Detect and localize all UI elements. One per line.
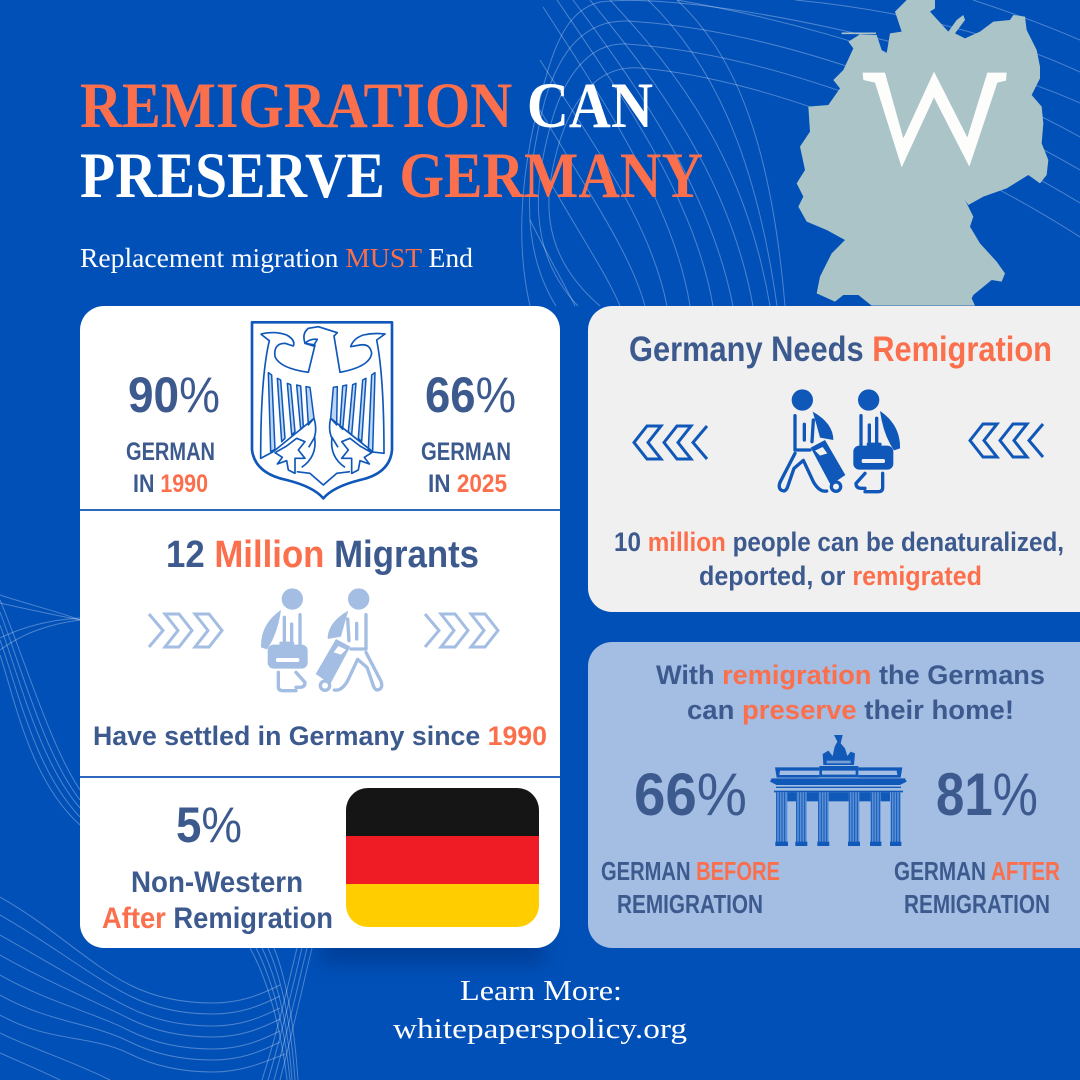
caption: settled since 1990: Have settled in Germany since 1990: [93, 721, 547, 751]
stat: 5 percent non-western: After Remigration: [102, 902, 333, 935]
stat: 90 percent German in 1990: IN 1990: [133, 470, 208, 498]
stat: 90 percent German in 1990: 90%: [128, 367, 220, 423]
title: REMIGRATION CAN: [80, 70, 653, 142]
stat: 90 percent German in 1990: [126, 367, 220, 498]
stat: 81 percent after: 81%: [936, 761, 1038, 828]
stat: 66 percent before: [601, 761, 780, 919]
heading: With remigration the Germans: [656, 660, 1045, 690]
heading: 12 million migrants: 12 Million Migrants: [166, 534, 479, 576]
icon: Brandenburg Gate: [770, 735, 907, 846]
stat: 66 percent German in 2025: IN 2025: [428, 470, 507, 498]
icon: migrants travelling: [261, 588, 382, 691]
arrows: left chevrons: [149, 614, 222, 647]
stat: 5 percent non-western: Non-Western: [131, 866, 303, 899]
stat: 66 percent German in 2025: GERMAN: [421, 438, 511, 466]
panel: preserve their home: [588, 642, 1080, 948]
stat: 5 percent non-western: 5%: [176, 797, 242, 853]
panel: Germany needs remigration: [588, 306, 1080, 612]
stat: 66 percent German in 2025: 66%: [425, 367, 516, 423]
text: 10 million people: deported, or remigrated: [699, 561, 982, 591]
icon: migrants leaving: [779, 389, 900, 492]
title: [80, 70, 703, 212]
stat: 66 percent German in 2025: [421, 367, 516, 498]
footer: learn more: Learn More:: [460, 975, 622, 1007]
stat: 66 percent before: 66%: [634, 761, 747, 828]
heading: [656, 660, 1045, 725]
title: PRESERVE GERMANY: [80, 140, 703, 212]
stat: 81 percent after: GERMAN AFTER: [894, 856, 1060, 886]
arrows: right chevrons: [970, 424, 1043, 457]
icon: German eagle shield: [252, 322, 392, 498]
arrows: right chevrons: [425, 614, 498, 647]
stat: 66 percent before: REMIGRATION: [617, 889, 763, 919]
subtitle: Replacement migration MUST End: [80, 243, 474, 273]
panel: left card: [80, 306, 560, 964]
stat: 5 percent non-western: [102, 797, 333, 935]
arrows: left chevrons: [634, 426, 707, 459]
map of Germany with W logo: [797, 0, 1048, 306]
stat: 66 percent before: GERMAN BEFORE: [601, 856, 780, 886]
footer: learn more: whitepaperspolicy.org: [393, 1013, 687, 1045]
text: 10 million people: [614, 527, 1064, 591]
icon: German flag: [346, 788, 539, 927]
footer: learn more: [393, 975, 687, 1045]
stat: 90 percent German in 1990: GERMAN: [126, 438, 215, 466]
heading: Germany Needs Remigration: [629, 330, 1052, 369]
stat: 81 percent after: [894, 761, 1060, 919]
heading: can preserve their home!: [687, 695, 1014, 725]
